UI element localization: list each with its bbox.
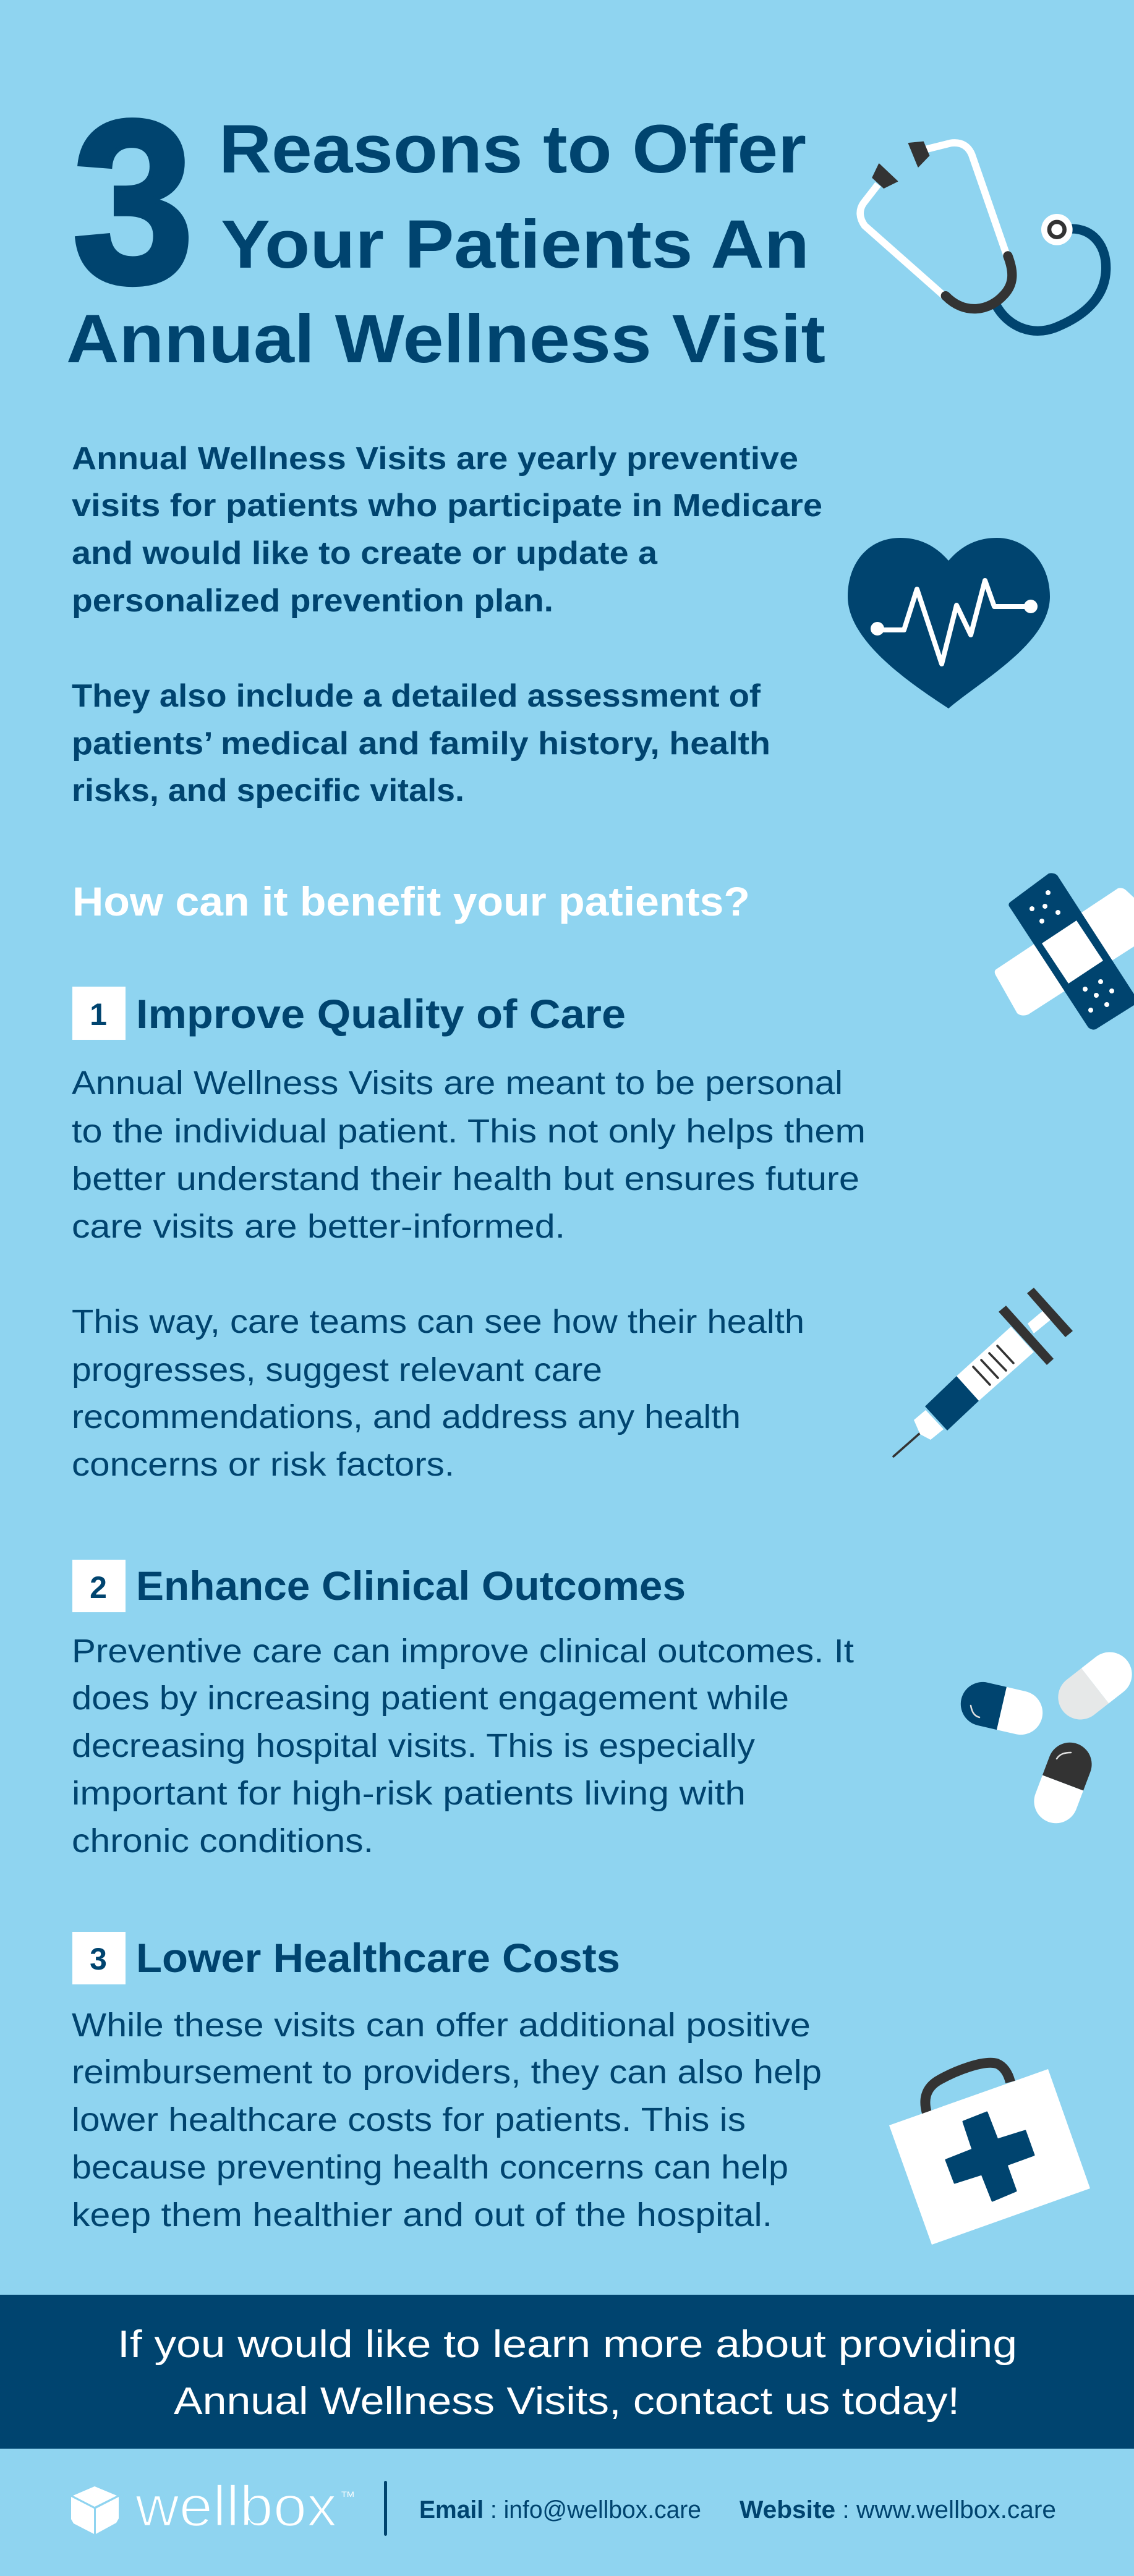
body: section 3: because preventing health concerns can help: [72, 2149, 788, 2186]
logo cube: [71, 2486, 119, 2534]
call to action banner: [0, 2295, 1134, 2449]
body: section 1 paragraph 2: [72, 1303, 804, 1483]
trademark: TM: [341, 2490, 354, 2499]
call to action banner: Annual Wellness Visits, contact us today!: [174, 2380, 960, 2423]
intro paragraph: visits for patients who participate in Medicare: [72, 488, 822, 524]
icon: syringe: [893, 1288, 1073, 1456]
body: section 1 paragraph 2: recommendations, and address any health: [72, 1398, 741, 1435]
body: section 1 paragraph 1: better understand their health but ensures future: [72, 1160, 859, 1197]
body: section 1 paragraph 1: Annual Wellness Visits are meant to be personal: [72, 1065, 843, 1102]
body: section 3: reimbursement to providers, they can also help: [72, 2054, 822, 2091]
body: section 1 paragraph 2: This way, care teams can see how their health: [72, 1303, 804, 1340]
body: section 3: While these visits can offer additional positive: [72, 2007, 811, 2044]
body: section 2: important for high-risk patients living with: [72, 1775, 746, 1812]
heading: enhance clinical outcomes: Enhance Clinical Outcomes: [136, 1563, 686, 1609]
number badge 1: 1: [90, 997, 107, 1032]
number badge 1: [72, 987, 126, 1040]
icon: stethoscope: [860, 142, 1106, 331]
number badge 3: [72, 1932, 126, 1984]
number badge 2: 2: [90, 1570, 107, 1605]
pill grey and white: [1049, 1643, 1134, 1728]
intro paragraph 2: [72, 678, 770, 809]
footer divider: [384, 2481, 387, 2536]
big numeral 3: 3: [72, 73, 194, 331]
section 3: [72, 1932, 822, 2234]
heading: lower healthcare costs: Lower Healthcare Costs: [136, 1935, 620, 1981]
subheading: How can it benefit your patients?: [72, 878, 750, 924]
body: section 1 paragraph 1: to the individual patient. This not only helps them: [72, 1113, 866, 1150]
title line 2: Your Patients An: [221, 206, 809, 283]
body: section 1 paragraph 1: [72, 1065, 866, 1245]
footer logo: wellbox: [71, 2474, 354, 2538]
contact details: [419, 2496, 1056, 2523]
body: section 3: [72, 2007, 822, 2234]
heading: improve quality of care: Improve Quality of Care: [136, 991, 626, 1037]
title line 1: Reasons to Offer: [219, 111, 806, 187]
intro paragraph 2: They also include a detailed assessment of: [72, 678, 761, 714]
intro paragraph: Annual Wellness Visits are yearly preventive: [72, 441, 798, 477]
body: section 3: keep them healthier and out of the hospital.: [72, 2196, 772, 2234]
body: section 3: lower healthcare costs for patients. This is: [72, 2101, 746, 2138]
icon: heart with pulse: [848, 538, 1050, 708]
icon: medical kit: [889, 2063, 1090, 2245]
body: section 2: [72, 1633, 854, 1860]
section 1: [72, 987, 866, 1483]
intro paragraph 2: patients’ medical and family history, health: [72, 726, 770, 762]
intro paragraph: and would like to create or update a: [72, 535, 658, 571]
intro paragraph 2: risks, and specific vitals.: [72, 773, 464, 809]
title: [66, 73, 825, 377]
intro paragraph: personalized prevention plan.: [72, 583, 553, 619]
icon: bandage: [995, 873, 1134, 1030]
body: section 1 paragraph 1: care visits are better-informed.: [72, 1208, 565, 1245]
body: section 2: decreasing hospital visits. This is especially: [72, 1727, 755, 1764]
logo wordmark: wellbox: [135, 2474, 337, 2538]
body: section 2: chronic conditions.: [72, 1822, 373, 1860]
body: section 1 paragraph 2: concerns or risk factors.: [72, 1446, 454, 1483]
call to action banner: If you would like to learn more about providing: [117, 2323, 1017, 2366]
body: section 2: Preventive care can improve clinical outcomes. It: [72, 1633, 854, 1670]
pill dark and white: [1028, 1736, 1098, 1829]
title line 3: Annual Wellness Visit: [66, 301, 825, 377]
number badge 2: [72, 1560, 126, 1612]
body: section 1 paragraph 2: progresses, suggest relevant care: [72, 1351, 602, 1388]
website: Website : www.wellbox.care: [740, 2496, 1056, 2523]
pill navy and white: [957, 1678, 1047, 1739]
number badge 3: 3: [90, 1942, 107, 1976]
icon: pills: [957, 1643, 1134, 1829]
section 2: [72, 1560, 854, 1860]
intro paragraph: [72, 441, 822, 619]
body: section 2: does by increasing patient engagement while: [72, 1680, 789, 1717]
email: Email : info@wellbox.care: [419, 2496, 701, 2523]
